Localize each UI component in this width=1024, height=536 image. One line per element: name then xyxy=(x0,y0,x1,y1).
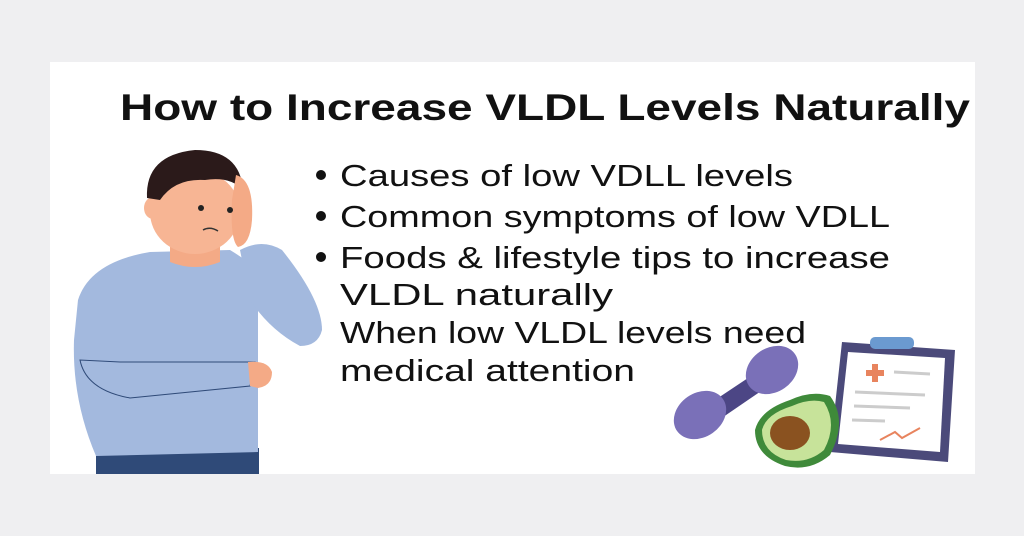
bullet list: When low VLDL levels need xyxy=(340,315,806,350)
bullet list: medical attention xyxy=(340,353,635,388)
bullet list: Foods & lifestyle tips to increase xyxy=(340,240,890,275)
icon: worried man xyxy=(74,150,322,474)
panel: white card xyxy=(50,62,975,474)
bullet list: Causes of low VDLL levels xyxy=(340,158,793,193)
icon: avocado xyxy=(755,394,839,468)
icon: dumbbell xyxy=(664,336,808,449)
icon: clipboard xyxy=(830,337,955,462)
bullet list xyxy=(316,158,890,388)
bullet list: Common symptoms of low VDLL xyxy=(340,199,890,234)
bullet list: VLDL naturally xyxy=(340,277,614,312)
title: How to Increase VLDL Levels Naturally xyxy=(120,87,971,128)
